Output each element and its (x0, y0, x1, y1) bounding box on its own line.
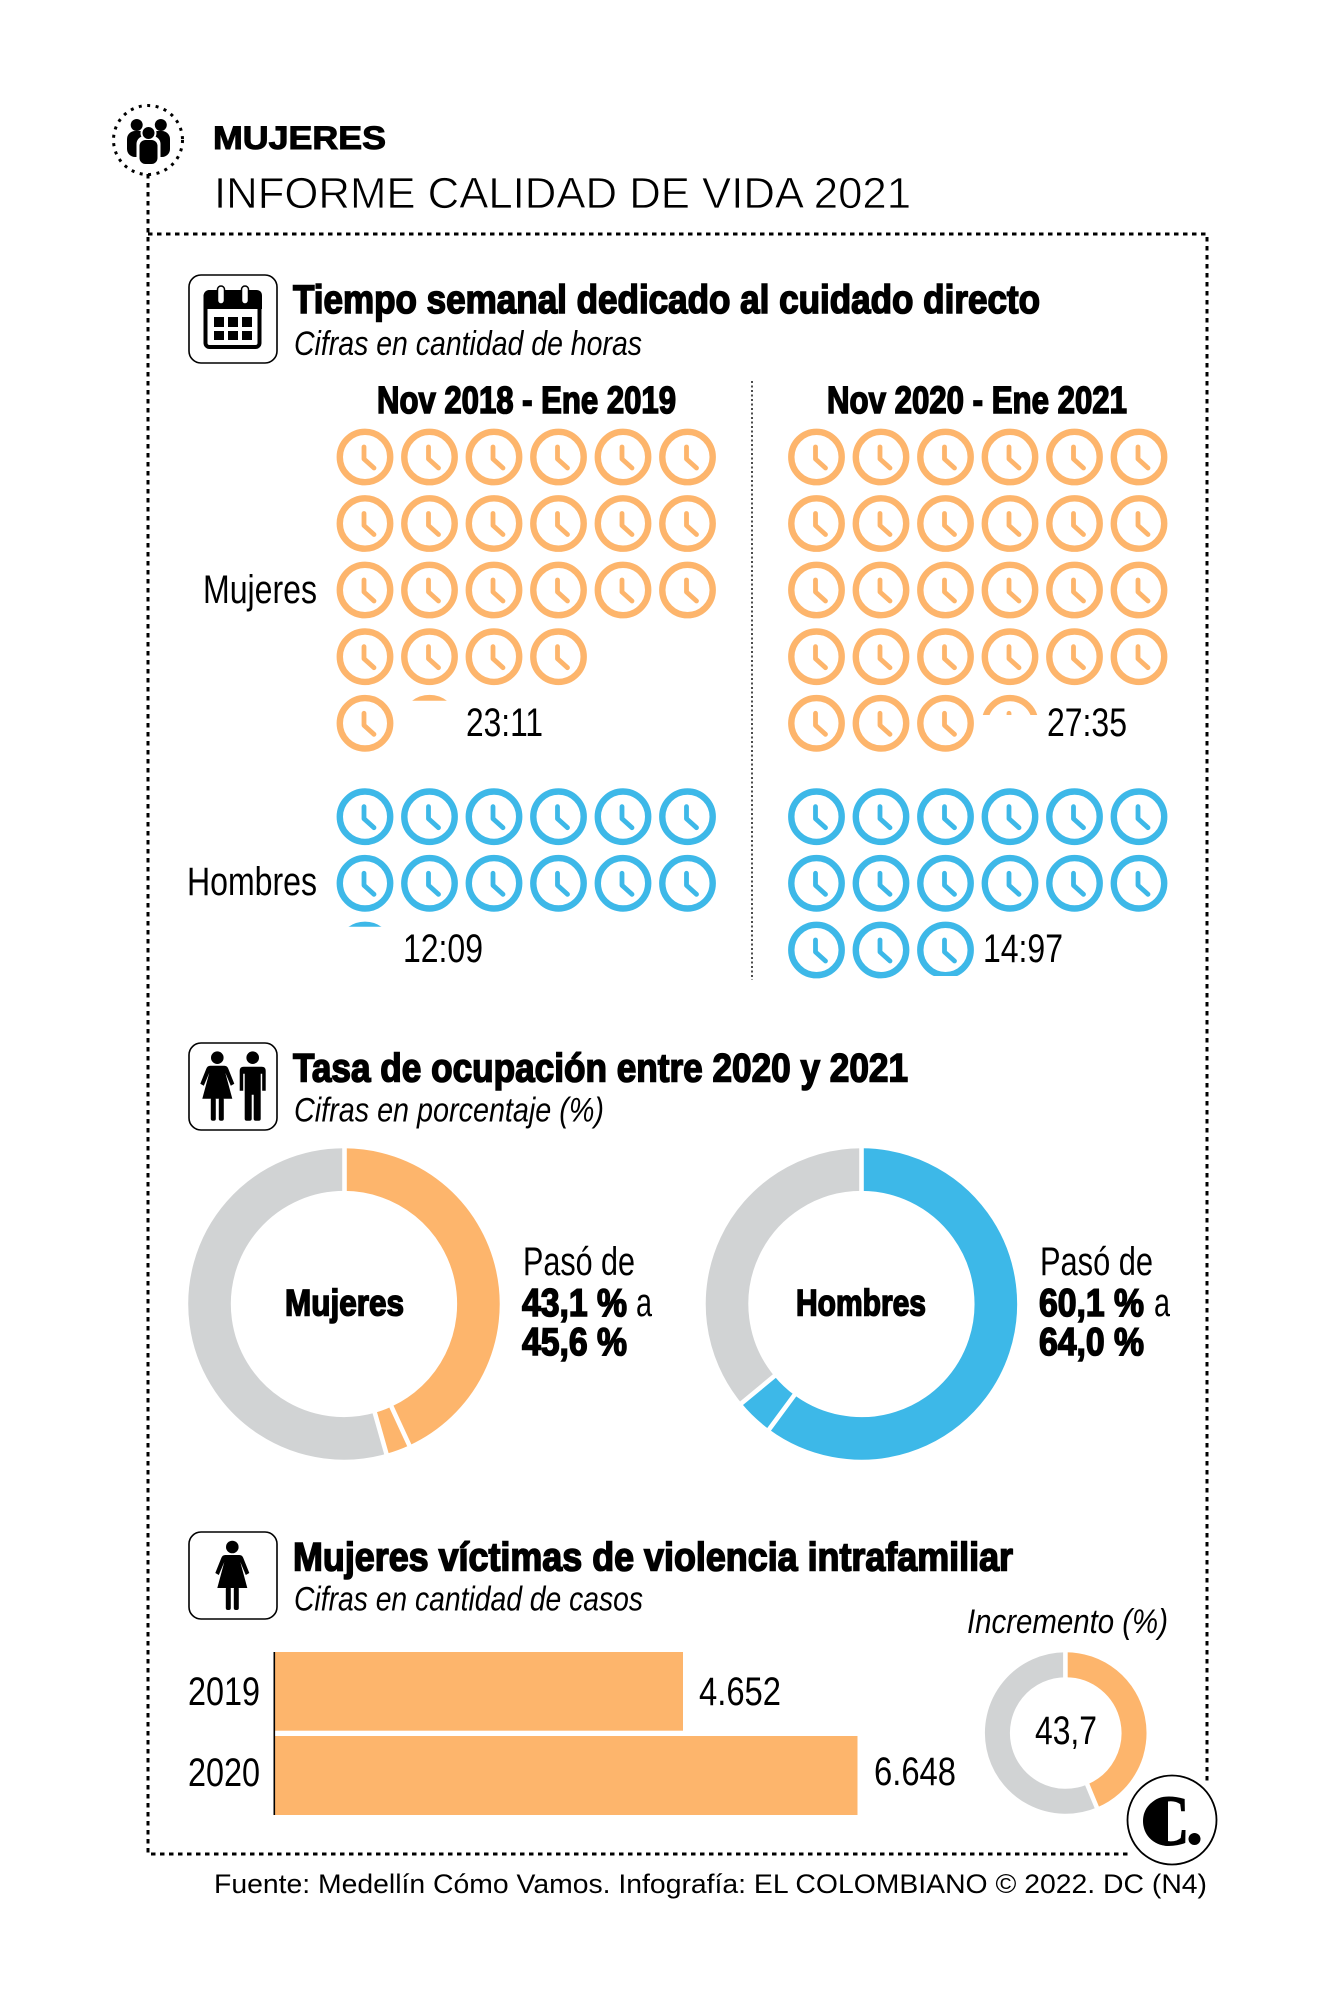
bar chart: 4.652 (699, 1670, 781, 1714)
value: 27:35: 27:35 (1047, 701, 1127, 745)
bar chart: 6.648 (874, 1750, 956, 1794)
logo: El Colombiano: C (1143, 1781, 1190, 1861)
value: 43,7: 43,7 (1035, 1709, 1097, 1753)
icon: calendar (189, 275, 277, 363)
note: cifras en casos: Cifras en cantidad de casos (294, 1581, 643, 1619)
subtitle: INFORME CALIDAD DE VIDA 2021: INFORME CALIDAD DE VIDA 2021 (214, 169, 911, 218)
heading: tiempo semanal: Tiempo semanal dedicado al cuidado directo (293, 278, 1040, 322)
text: paso de mujeres: Pasó de (523, 1240, 635, 1284)
icon: woman (189, 1532, 277, 1619)
bar chart: 2020 (188, 1751, 260, 1795)
column heading 2018-2019: Nov 2018 - Ene 2019 (377, 380, 676, 422)
text: paso de mujeres: a (636, 1281, 653, 1325)
text: paso de mujeres: 43,1 % (522, 1282, 627, 1325)
icon: woman and man (189, 1043, 277, 1130)
label: Hombres: Hombres (187, 860, 317, 904)
dotted frame (148, 174, 1207, 1854)
text: paso de hombres: Pasó de (1040, 1240, 1153, 1284)
icon: people in dotted circle (114, 106, 182, 174)
text: paso de hombres (1039, 1240, 1171, 1364)
value: 12:09: 12:09 (403, 927, 483, 971)
title: MUJERES: MUJERES (213, 120, 386, 156)
note: cifras en porcentaje: Cifras en porcentaje (%) (294, 1092, 604, 1130)
label: Mujeres: Mujeres (285, 1283, 404, 1324)
bar chart (188, 1652, 956, 1815)
heading: tasa de ocupacion: Tasa de ocupación entre 2020 y 2021 (293, 1047, 908, 1091)
label: Hombres: Hombres (796, 1283, 926, 1324)
clocks: hombres 2020-2021 (791, 792, 1164, 975)
note: cifras en horas: Cifras en cantidad de horas (294, 325, 642, 363)
value: 14:97: 14:97 (983, 927, 1063, 971)
bar chart: 2019 (188, 1670, 260, 1714)
clocks: mujeres 2018-2019 (340, 432, 713, 748)
panel: tiempo semanal de cuidado (187, 275, 1164, 980)
column heading 2020-2021: Nov 2020 - Ene 2021 (827, 380, 1127, 422)
label: incremento: Incremento (%) (967, 1603, 1168, 1641)
heading: mujeres victimas: Mujeres víctimas de violencia intrafamiliar (293, 1536, 1013, 1580)
panel: tasa de ocupacion (189, 1043, 1171, 1458)
donut: hombres (727, 1144, 996, 1438)
donut: mujeres (210, 1144, 478, 1458)
label: Mujeres: Mujeres (203, 568, 317, 612)
value: 23:11: 23:11 (466, 701, 543, 745)
text: paso de hombres: 60,1 % (1039, 1282, 1144, 1325)
text: paso de mujeres: 45,6 % (522, 1321, 627, 1364)
divider (751, 381, 753, 980)
text: paso de hombres: 64,0 % (1039, 1321, 1144, 1364)
text: paso de hombres: a (1154, 1281, 1171, 1325)
logo: El Colombiano (1128, 1776, 1216, 1864)
source note: Fuente: Medellín Cómo Vamos. Infografía: EL COLOMBIANO © 2022. DC (N4) (214, 1869, 1207, 1899)
donut: incremento (997, 1648, 1134, 1810)
clocks: mujeres 2020-2021 (791, 432, 1164, 748)
text: paso de mujeres (522, 1240, 653, 1364)
clocks: hombres 2018-2019 (336, 788, 716, 927)
panel: violencia intrafamiliar (188, 1532, 1168, 1815)
